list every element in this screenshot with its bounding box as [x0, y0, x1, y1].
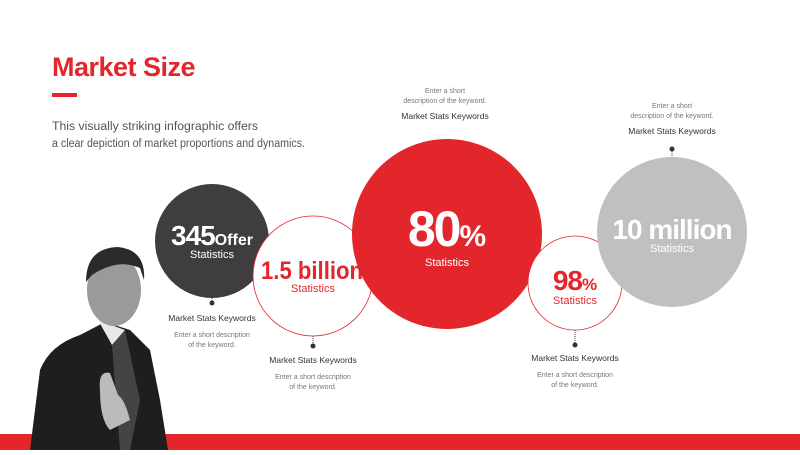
title: Market Size	[52, 52, 196, 82]
circle: 10 million: 10 million	[612, 214, 732, 245]
bottom red band	[0, 434, 800, 450]
circle: 80%: Market Stats Keywords	[401, 111, 489, 121]
circle: 80%: Statistics	[425, 257, 470, 269]
circle: 345 Offer: Statistics	[190, 249, 235, 261]
circle: 1.5 billion: Market Stats Keywords	[269, 355, 357, 365]
circle: 98%: Enter a short description	[537, 372, 613, 379]
circle: 345 Offer: 345Offer	[171, 220, 253, 251]
circle: 80%: 80%	[408, 201, 486, 257]
value: 1.5 billion: 1.5 billion	[261, 257, 363, 285]
circle: 345 Offer: Enter a short description	[174, 332, 250, 339]
subtitle: a clear depiction of market proportions and dynamics.	[52, 138, 305, 150]
photo: businessman	[30, 247, 168, 450]
title	[52, 52, 196, 97]
circle: 98%	[528, 236, 622, 389]
subtitle	[52, 121, 305, 150]
circle: 98%: 98%	[553, 265, 597, 296]
circle: 345 Offer	[155, 184, 269, 349]
circle: 98%: Market Stats Keywords	[531, 353, 619, 363]
circle: 80%: Enter a short	[425, 88, 465, 95]
circle: 1.5 billion: Enter a short description	[275, 374, 351, 381]
circle: 1.5 billion: of the keyword.	[289, 384, 337, 391]
circle: 345 Offer: of the keyword.	[188, 342, 236, 349]
circle: 80%	[352, 88, 542, 329]
circle: 345 Offer: Market Stats Keywords	[168, 313, 256, 323]
circle: 10 million: Statistics	[650, 243, 695, 255]
circle: 10 million: Market Stats Keywords	[628, 126, 716, 136]
circle: 98%: of the keyword.	[551, 382, 599, 389]
circle: 98%: Statistics	[553, 295, 598, 307]
circle: 10 million: description of the keyword.	[630, 113, 714, 120]
circle: 1.5 billion	[253, 216, 373, 391]
circle: 10 million	[597, 103, 747, 307]
circle: 1.5 billion: Statistics	[291, 283, 336, 295]
subtitle: This visually striking infographic offers	[52, 121, 258, 133]
circle: 10 million: Enter a short	[652, 103, 692, 110]
circle: 80%: description of the keyword.	[403, 98, 487, 105]
